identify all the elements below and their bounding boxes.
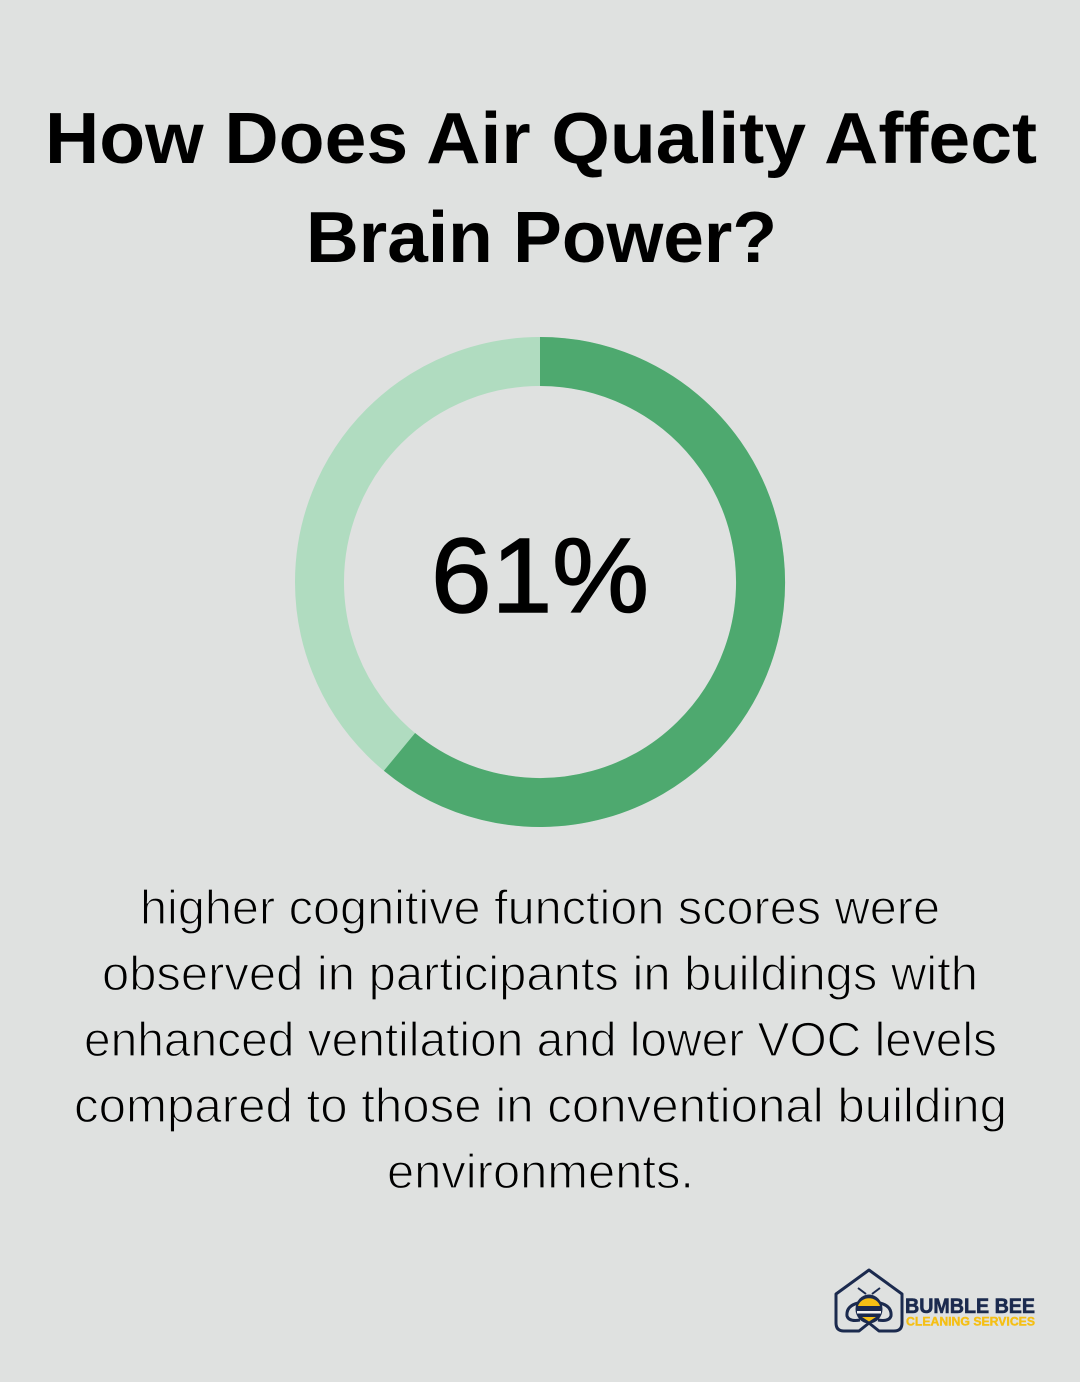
logo wordmark: BUMBLE BEE xyxy=(905,1295,1035,1318)
description text: enhanced ventilation and lower VOC levels xyxy=(84,1014,997,1067)
description text xyxy=(74,882,1007,1199)
description text: compared to those in conventional building xyxy=(74,1080,1007,1133)
title xyxy=(45,99,1037,278)
donut chart: 61% xyxy=(320,361,761,802)
description text: higher cognitive function scores were xyxy=(140,882,940,935)
icon: house outline xyxy=(836,1270,902,1331)
statistic: 61%: 61% xyxy=(431,517,649,635)
logo: Bumble Bee Cleaning Services xyxy=(836,1270,1035,1331)
description text: observed in participants in buildings with xyxy=(102,948,978,1001)
icon: bee xyxy=(847,1288,891,1324)
title: How Does Air Quality Affect xyxy=(45,99,1037,179)
title: Brain Power? xyxy=(306,198,777,278)
logo tagline: CLEANING SERVICES xyxy=(906,1314,1035,1328)
description text: environments. xyxy=(387,1146,694,1199)
